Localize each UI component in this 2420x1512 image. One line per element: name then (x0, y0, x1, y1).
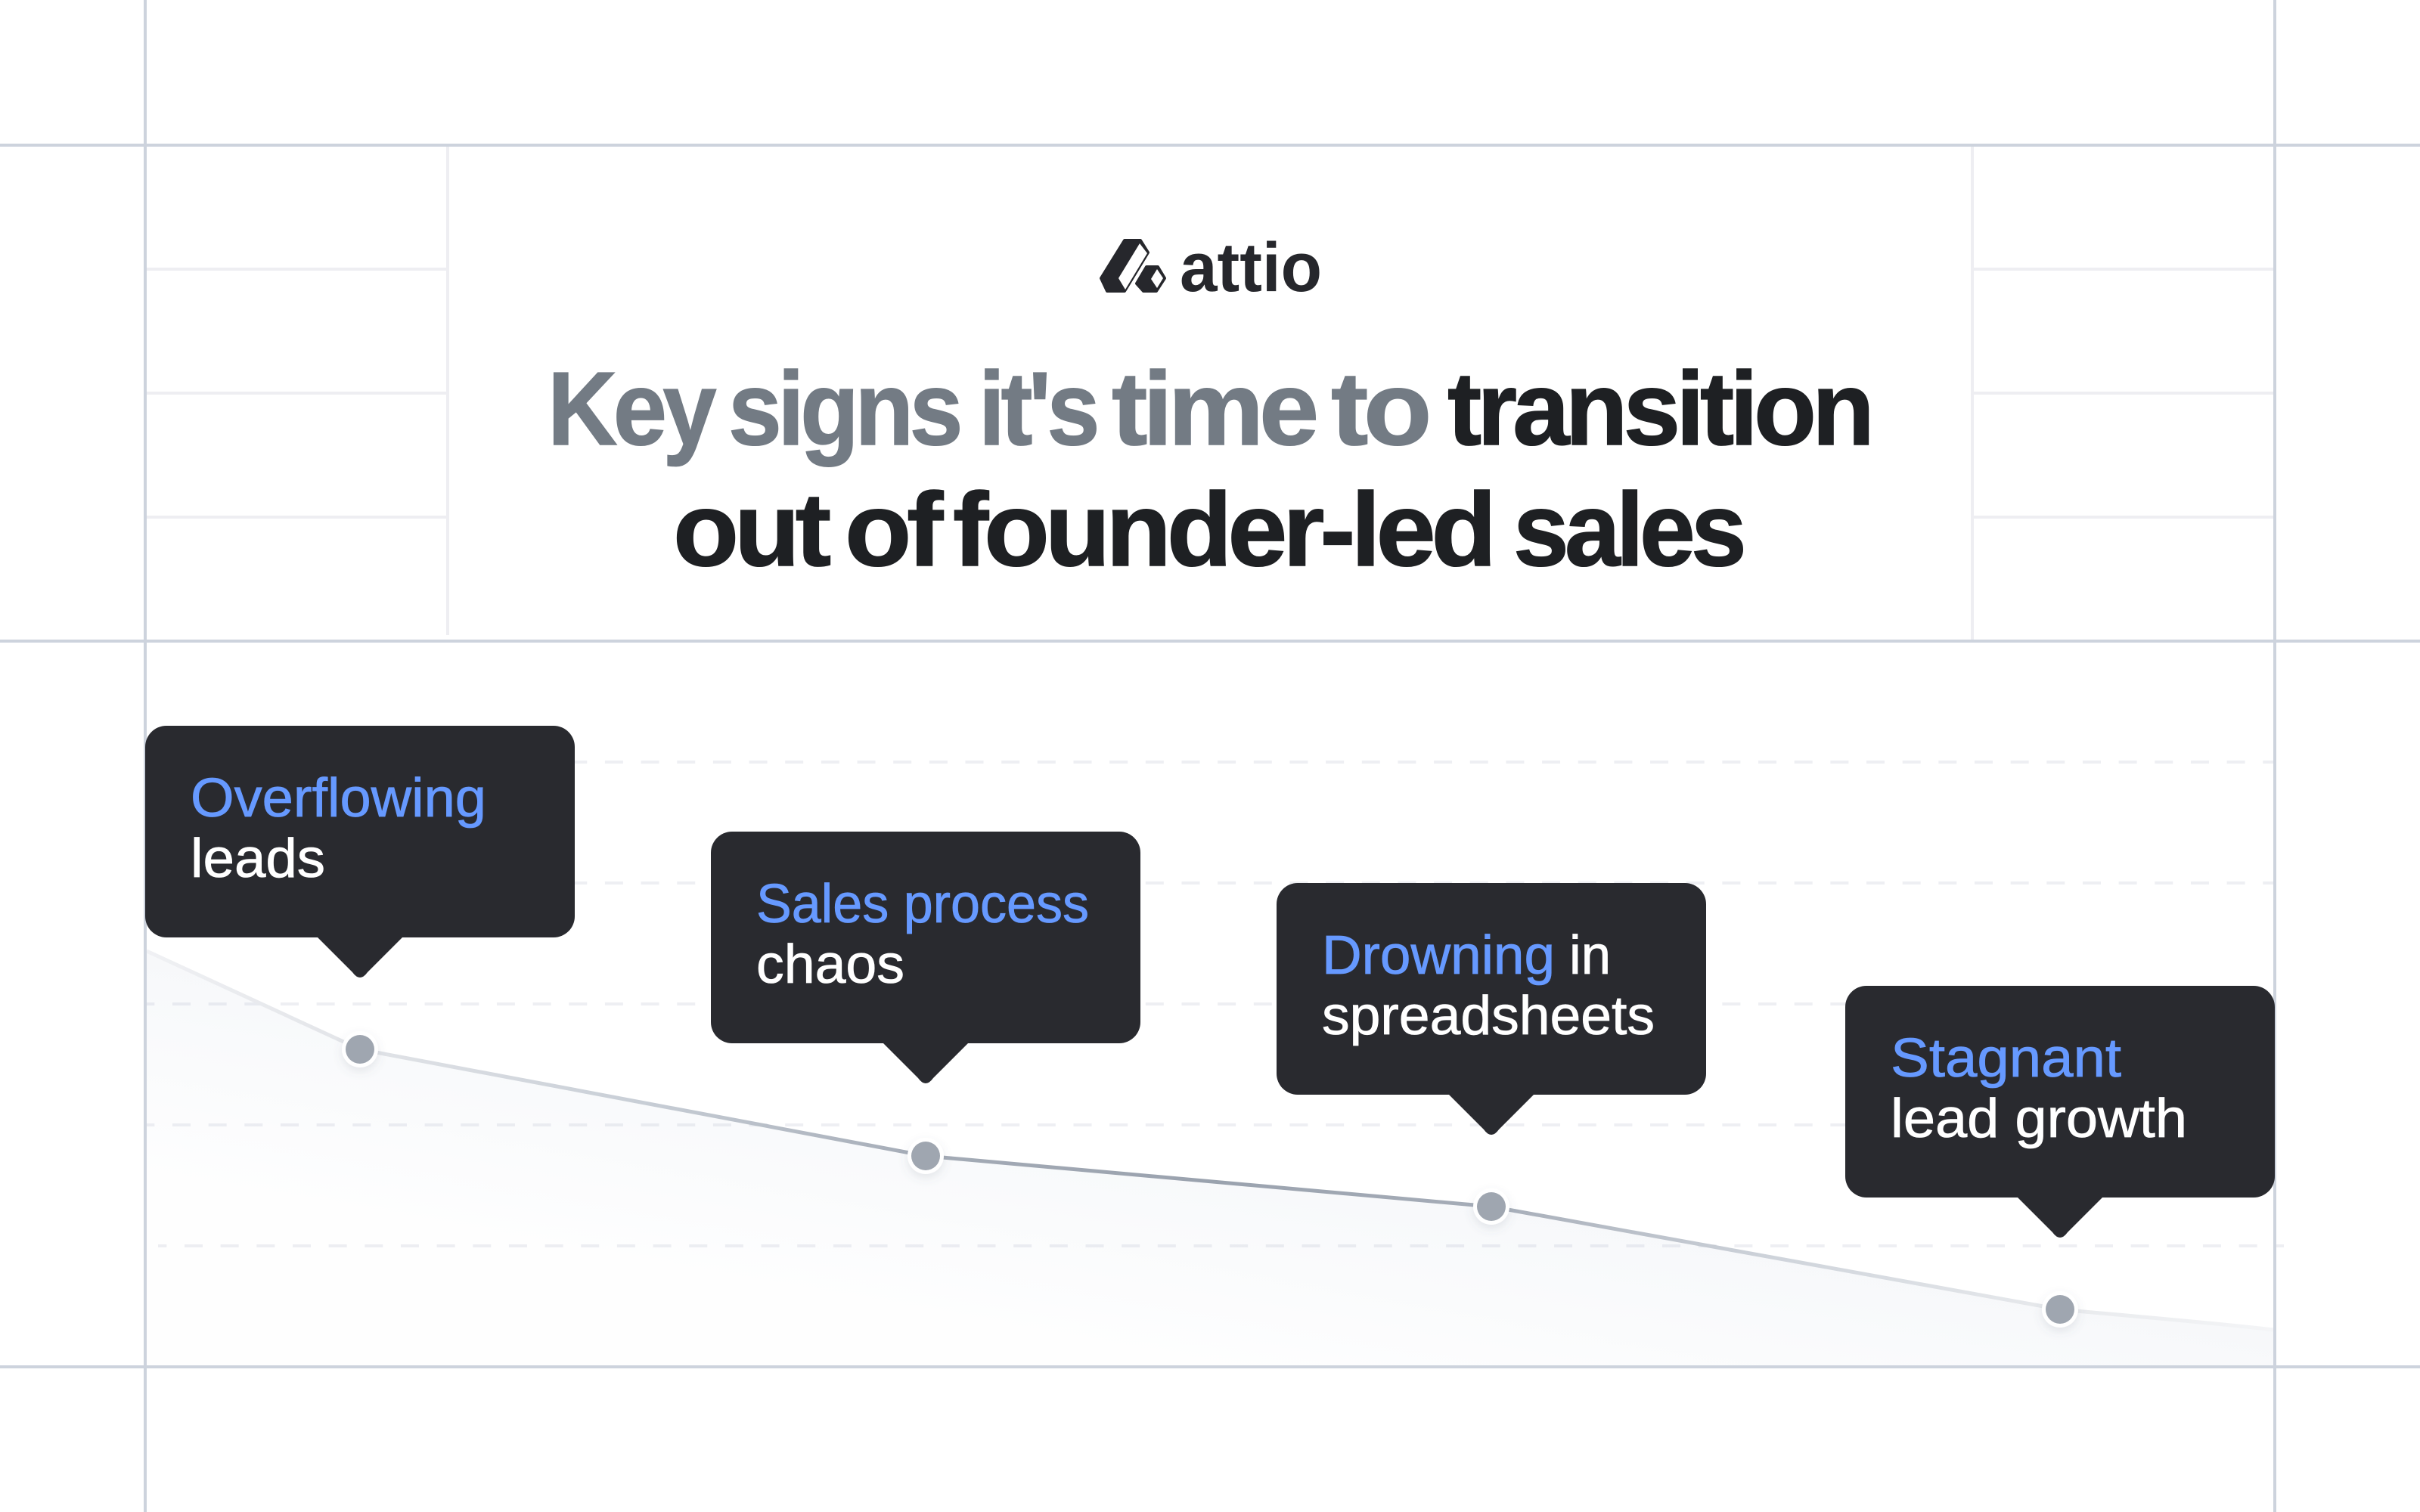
title line 1 (548, 351, 1870, 467)
title line 1: it's (979, 351, 1097, 467)
dot 3 (1473, 1188, 1509, 1225)
callout text: leads: leads (191, 829, 325, 889)
marker dots (342, 1031, 2078, 1328)
dot 1 (342, 1031, 378, 1067)
callout text: spreadsheets: spreadsheets (1322, 986, 1655, 1046)
title line 2: sales (1513, 472, 1743, 588)
chart trend line (147, 951, 2273, 1330)
callout text: Drowning: Drowning (1322, 925, 1555, 986)
title line 2: of (845, 472, 944, 588)
title line 1: time (1112, 351, 1316, 467)
callout: drowning in spreadsheets (1277, 883, 1706, 1135)
title line 1: transition (1447, 351, 1870, 467)
title line 1: to (1331, 351, 1428, 467)
callout text: Sales process: Sales process (756, 874, 1089, 934)
logo: attio (1101, 229, 1322, 306)
chart: declining area line (147, 951, 2273, 1365)
title line 2 (673, 472, 1743, 588)
logo wordmark: attio (1180, 229, 1322, 306)
title (548, 351, 1870, 588)
title line 1: Key (548, 351, 717, 467)
callout text: in: in (1569, 925, 1611, 986)
title line 2: out (673, 472, 830, 588)
callout text: chaos: chaos (756, 934, 904, 995)
chart area fill (147, 951, 2273, 1365)
dot 2 (908, 1138, 944, 1174)
callout: stagnant lead growth (1845, 986, 2275, 1238)
icon: attio mark (1101, 240, 1165, 291)
callout: overflowing leads (145, 726, 575, 978)
callout text: Stagnant: Stagnant (1891, 1028, 2121, 1089)
title line 1: signs (728, 351, 960, 467)
callout: sales process chaos (711, 832, 1140, 1083)
callout text: lead growth: lead growth (1891, 1089, 2187, 1149)
dot 4 (2042, 1291, 2078, 1328)
title line 2: founder-led (953, 472, 1492, 588)
callout text: Overflowing: Overflowing (191, 768, 486, 829)
